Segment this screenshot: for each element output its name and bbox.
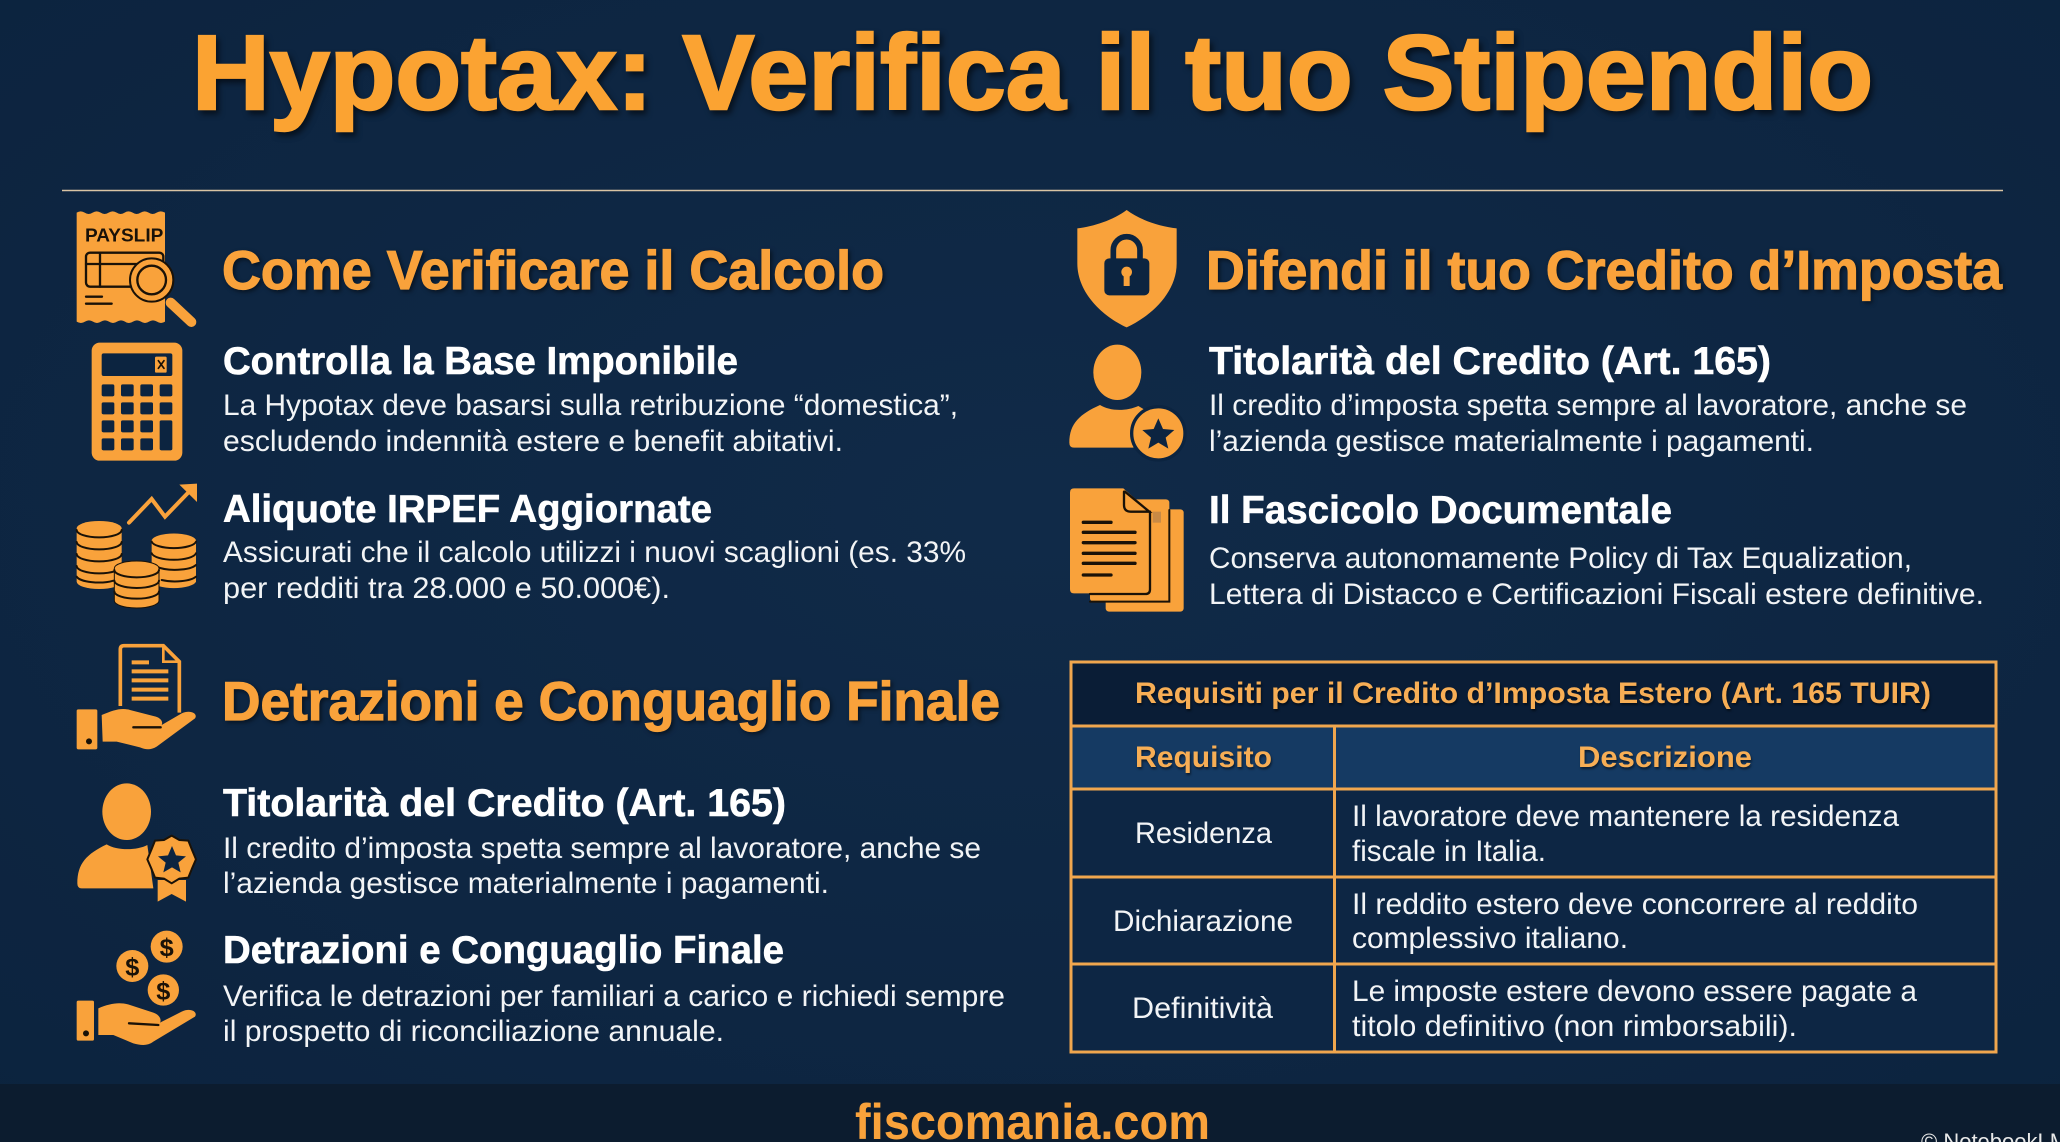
icon: hand with dollar coins: $ xyxy=(160,934,174,962)
title: Hypotax: Verifica il tuo Stipendio xyxy=(192,14,1873,132)
panel: detrazioni e conguaglio finale xyxy=(77,646,1005,1048)
row: definitività: Definitività xyxy=(1132,992,1273,1025)
row: dichiarazione xyxy=(1113,888,1918,955)
item: il fascicolo documentale: Lettera di Distacco e Certificazioni Fiscali estere definitive. xyxy=(1209,578,1984,611)
item: detrazioni e conguaglio: il prospetto di riconciliazione annuale. xyxy=(223,1015,724,1048)
icon: hand with dollar coins xyxy=(77,931,196,1045)
icon: document stack xyxy=(1070,488,1184,612)
icon: shield with padlock xyxy=(1077,210,1177,327)
item: titolarità del credito: Titolarità del Credito (Art. 165) xyxy=(223,782,786,825)
item: detrazioni e conguaglio: Detrazioni e Conguaglio Finale xyxy=(223,929,784,972)
icon: hand holding document xyxy=(77,646,196,749)
row: dichiarazione: complessivo italiano. xyxy=(1352,922,1628,955)
icon: calculator xyxy=(92,343,182,461)
item: controlla la base imponibile: La Hypotax deve basarsi sulla retribuzione “domestica”, xyxy=(223,389,958,422)
row: residenza: Il lavoratore deve mantenere la residenza xyxy=(1352,800,1899,833)
heading: difendi il tuo credito d'imposta: Difendi il tuo Credito d’Imposta xyxy=(1206,239,2002,301)
item: il fascicolo documentale xyxy=(1209,489,1984,611)
row: definitività: Le imposte estere devono essere pagate a xyxy=(1352,975,1917,1008)
item: titolarità del credito xyxy=(1209,340,1967,458)
row: definitività xyxy=(1132,975,1917,1043)
item: controlla la base imponibile xyxy=(223,340,958,458)
table: requisiti credito d'imposta estero xyxy=(1071,662,1996,1052)
item: titolarità del credito: Titolarità del Credito (Art. 165) xyxy=(1209,340,1771,383)
table header: Descrizione xyxy=(1578,741,1752,774)
item: controlla la base imponibile: escludendo indennità estere e benefit abitativi. xyxy=(223,425,843,458)
table header xyxy=(1135,741,1752,774)
item: aliquote irpef aggiornate: per redditi tra 28.000 e 50.000€). xyxy=(223,572,670,605)
item: detrazioni e conguaglio: Verifica le detrazioni per familiari a carico e richiedi sempre xyxy=(223,980,1005,1013)
icon: payslip with magnifier: PAYSLIP xyxy=(85,225,163,246)
item: detrazioni e conguaglio xyxy=(223,929,1005,1048)
row: residenza: Residenza xyxy=(1135,817,1272,850)
item: titolarità del credito: Il credito d’imposta spetta sempre al lavoratore, anche se xyxy=(1209,389,1967,422)
item: aliquote irpef aggiornate xyxy=(223,488,966,605)
heading: detrazioni e conguaglio finale: Detrazioni e Conguaglio Finale xyxy=(222,670,1000,732)
row: dichiarazione: Il reddito estero deve concorrere al reddito xyxy=(1352,888,1918,921)
icon: person with award medal xyxy=(77,783,196,902)
panel: difendi il tuo credito d'imposta xyxy=(1069,210,2002,612)
item: il fascicolo documentale: Il Fascicolo Documentale xyxy=(1209,489,1672,532)
heading: come verificare il calcolo: Come Verificare il Calcolo xyxy=(222,239,884,301)
icon: coins with rising arrow xyxy=(77,484,197,608)
table title: Requisiti per il Credito d’Imposta Estero (Art. 165 TUIR) xyxy=(1135,677,1931,710)
icon: hand with dollar coins: $ xyxy=(125,953,139,981)
row: residenza xyxy=(1135,800,1899,868)
icon: payslip with magnifier xyxy=(77,211,191,323)
item: titolarità del credito: l’azienda gestisce materialmente i pagamenti. xyxy=(1209,425,1814,458)
row: definitività: titolo definitivo (non rimborsabili). xyxy=(1352,1010,1797,1043)
item: titolarità del credito: l’azienda gestisce materialmente i pagamenti. xyxy=(223,867,829,900)
footer band xyxy=(0,1084,2060,1142)
item: aliquote irpef aggiornate: Assicurati che il calcolo utilizzi i nuovi scaglioni (es. 33% xyxy=(223,536,966,569)
item: titolarità del credito: Il credito d’imposta spetta sempre al lavoratore, anche se xyxy=(223,832,981,865)
item: controlla la base imponibile: Controlla la Base Imponibile xyxy=(223,340,738,383)
item: aliquote irpef aggiornate: Aliquote IRPEF Aggiornate xyxy=(223,488,712,531)
item: titolarità del credito xyxy=(223,782,981,900)
item: il fascicolo documentale: Conserva autonomamente Policy di Tax Equalization, xyxy=(1209,542,1912,575)
row: dichiarazione: Dichiarazione xyxy=(1113,905,1293,938)
icon: person with star badge xyxy=(1069,345,1185,460)
row: residenza: fiscale in Italia. xyxy=(1352,835,1546,868)
table header: Requisito xyxy=(1135,741,1272,774)
icon: hand with dollar coins: $ xyxy=(156,977,170,1005)
panel: come verificare il calcolo xyxy=(77,211,966,608)
